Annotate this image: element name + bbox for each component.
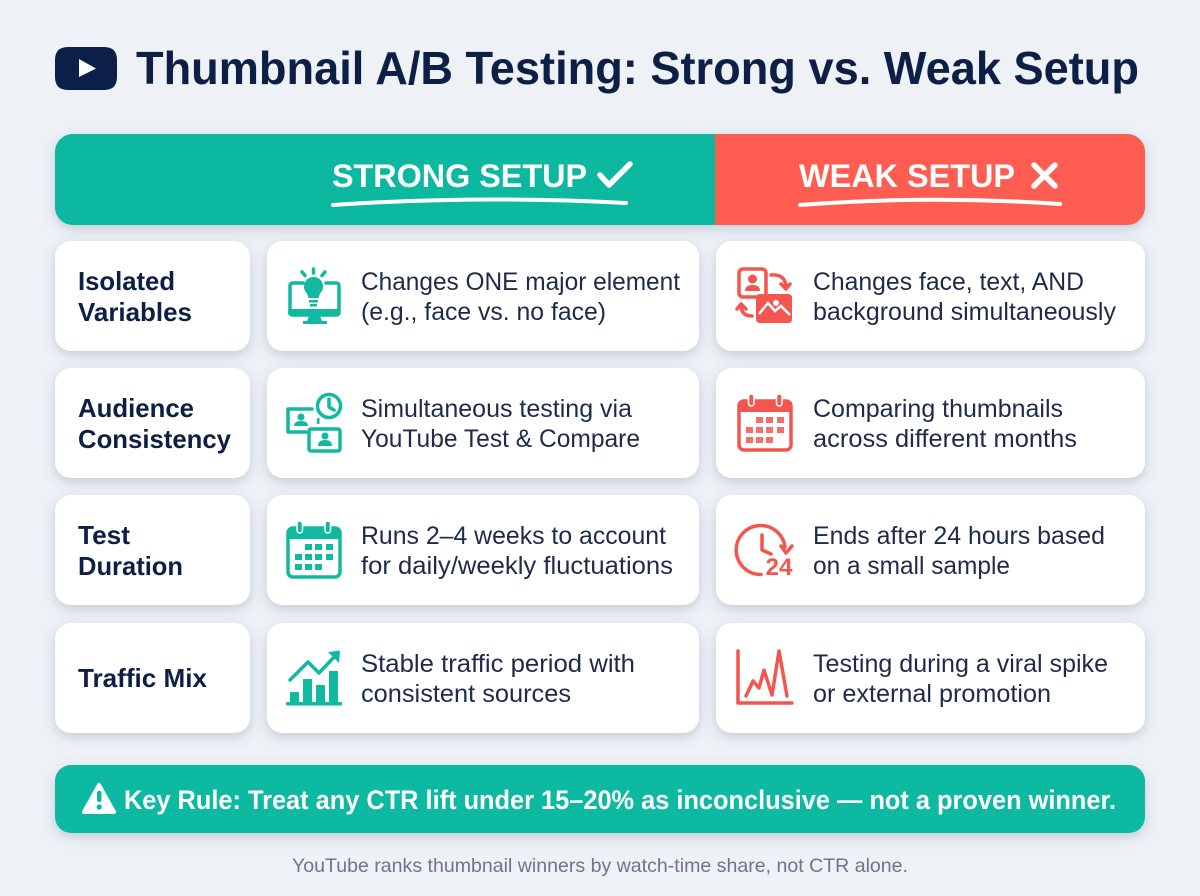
icon: 24 hour clock: 24 bbox=[766, 554, 793, 581]
icon: monitor with light bulb bbox=[288, 269, 340, 324]
weak card: test duration: Ends after 24 hours based bbox=[813, 522, 1105, 550]
header band bbox=[55, 134, 1145, 225]
weak card: isolated variables: Changes face, text, AND bbox=[813, 268, 1084, 296]
row: audience consistency bbox=[55, 368, 1145, 478]
label card: isolated variables: Variables bbox=[78, 297, 192, 327]
label card: traffic mix bbox=[55, 623, 250, 733]
label card: test duration: Test bbox=[78, 520, 130, 550]
column heading: strong setup bbox=[332, 158, 630, 205]
column heading: strong setup: STRONG SETUP bbox=[332, 158, 587, 194]
weak card: traffic mix bbox=[716, 623, 1145, 733]
weak card: isolated variables bbox=[716, 241, 1145, 351]
weak card: traffic mix: Testing during a viral spike bbox=[813, 650, 1108, 678]
callout: key rule bbox=[55, 765, 1145, 833]
footnote: YouTube ranks thumbnail winners by watch-time share, not CTR alone. bbox=[292, 855, 908, 877]
strong card: audience consistency: Simultaneous testing via bbox=[361, 395, 632, 423]
strong card: audience consistency: YouTube Test & Compare bbox=[361, 425, 640, 453]
strong card: traffic mix: Stable traffic period with bbox=[361, 650, 635, 678]
icon: rising bar chart bbox=[286, 650, 342, 706]
callout: key rule: Key Rule: Treat any CTR lift under 15–20% as inconclusive — not a proven winner. bbox=[124, 785, 1116, 815]
strong card: audience consistency bbox=[267, 368, 699, 478]
weak card: test duration bbox=[716, 495, 1145, 605]
label card: test duration: Duration bbox=[78, 551, 183, 581]
strong card: test duration bbox=[267, 495, 699, 605]
strong card: test duration: Runs 2–4 weeks to account bbox=[361, 522, 666, 550]
strong card: isolated variables: (e.g., face vs. no face) bbox=[361, 298, 606, 326]
strong card: traffic mix: consistent sources bbox=[361, 680, 571, 708]
row: traffic mix bbox=[55, 623, 1145, 733]
icon: calendar bbox=[287, 521, 341, 577]
label card: audience consistency bbox=[55, 368, 250, 478]
label card: isolated variables: Isolated bbox=[78, 266, 175, 296]
icon: swapping face and image bbox=[737, 269, 792, 323]
strong card: isolated variables: Changes ONE major element bbox=[361, 268, 680, 296]
icon: calendar bbox=[738, 394, 792, 450]
weak card: test duration: on a small sample bbox=[813, 552, 1010, 580]
strong card: test duration: for daily/weekly fluctuations bbox=[361, 552, 673, 580]
label card: traffic mix: Traffic Mix bbox=[78, 663, 208, 693]
weak card: audience consistency: across different months bbox=[813, 425, 1077, 453]
row: test duration bbox=[55, 495, 1145, 605]
label card: test duration bbox=[55, 495, 250, 605]
column heading: weak setup: WEAK SETUP bbox=[799, 158, 1015, 194]
strong card: isolated variables bbox=[267, 241, 699, 351]
icon: warning triangle bbox=[84, 785, 114, 812]
weak card: audience consistency bbox=[716, 368, 1145, 478]
row: isolated variables bbox=[55, 241, 1145, 351]
title: Thumbnail A/B Testing: Strong vs. Weak Setup bbox=[136, 42, 1139, 94]
column heading: weak setup bbox=[799, 158, 1060, 205]
weak card: traffic mix: or external promotion bbox=[813, 680, 1051, 708]
weak card: isolated variables: background simultaneously bbox=[813, 298, 1116, 326]
strong card: traffic mix bbox=[267, 623, 699, 733]
icon: 24 hour clock bbox=[736, 526, 793, 581]
icon: spiky line chart bbox=[738, 651, 792, 703]
label card: audience consistency: Consistency bbox=[78, 424, 232, 454]
icon: video play logo bbox=[55, 47, 117, 90]
label card: isolated variables bbox=[55, 241, 250, 351]
weak card: audience consistency: Comparing thumbnails bbox=[813, 395, 1063, 423]
icon: screens with clock bbox=[288, 394, 340, 451]
label card: audience consistency: Audience bbox=[78, 393, 194, 423]
